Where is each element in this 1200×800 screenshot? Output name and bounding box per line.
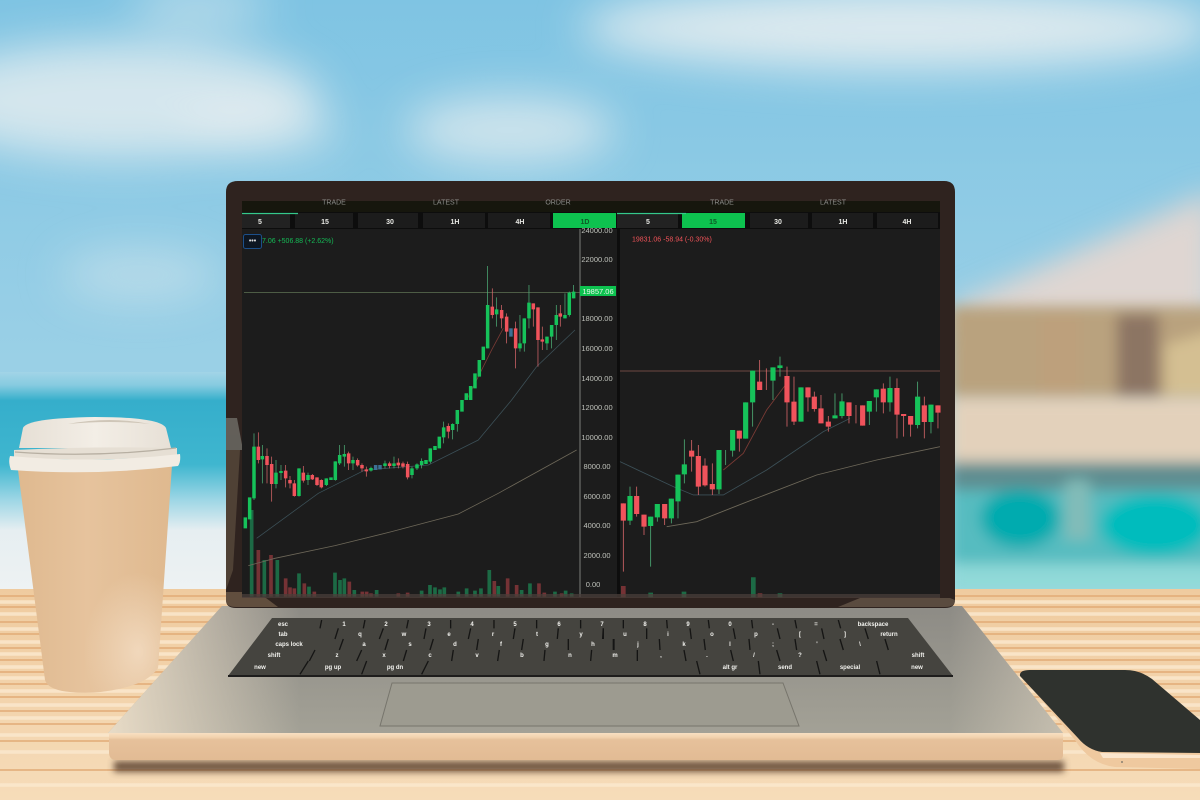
cup lid [9,417,180,472]
lid bottom reflections [226,592,955,607]
current price tag: 19857.06 [582,287,614,296]
price axis labels: 2000.00 [583,551,611,560]
header tabs row: ORDER [545,200,571,206]
laptop front edge [109,733,1063,760]
header tabs row: LATEST [820,200,847,206]
price axis labels: 12000.00 [581,403,613,412]
left chart candlesticks: lower section [245,400,462,528]
timeframe bar: 5 [258,219,262,226]
phone body edge [1020,672,1200,769]
key legends: return [880,632,898,638]
key legends: shift [912,653,924,659]
key legends: w [401,632,407,638]
left chart volume bars [252,510,572,597]
key legends: ' [816,642,818,648]
right chart volume bars [623,577,780,597]
left chart moving averages [248,328,577,566]
timeframe bar: 30 [386,219,394,226]
laptop base deck [108,606,1063,733]
key legends: - [772,622,774,628]
key legends: [ [799,632,801,638]
timeframe bar: 30 [774,219,782,226]
phone screen [1020,670,1200,753]
right chart candlesticks [623,357,938,572]
price axis labels: 22000.00 [581,255,613,264]
key legends: r [492,632,495,638]
header tabs row: LATEST [433,200,460,206]
key legends: l [729,642,731,648]
keyboard [228,618,953,677]
key legends: ; [772,642,774,648]
price line and axis rule [244,292,580,294]
coffee cup [9,417,180,693]
sky clouds [0,0,1200,300]
key legends: new [911,665,923,671]
timeframe bar: 1H [839,219,847,226]
key legends: i [667,632,669,638]
cup body [18,465,172,693]
key legends: 6 [557,622,561,628]
key legends: v [475,653,479,659]
key legends: 0 [728,622,732,628]
key legends [254,622,924,671]
key legends: k [682,642,686,648]
key legends: b [520,653,524,659]
key legends: / [753,653,755,659]
key legends: esc [278,622,289,628]
key legends: special [840,665,860,671]
price axis labels: 10000.00 [581,433,613,442]
wooden table [0,589,1200,800]
header tabs row: TRADE [322,200,346,206]
key legends: s [408,642,412,648]
price axis labels: 14000.00 [581,374,613,383]
key legends: x [382,653,386,659]
key legends: j [636,642,639,648]
key legends: = [814,622,818,628]
timeframe bar [242,212,940,229]
header tabs row: TRADE [710,200,734,206]
touchpad [380,683,799,726]
key legends: 5 [513,622,517,628]
ocean and sand left [0,372,240,592]
key legends: h [591,642,595,648]
key legends: 8 [643,622,647,628]
beach background [0,0,1200,600]
key separators [300,620,614,674]
key legends: caps lock [275,642,303,648]
key legends: \ [859,642,861,648]
price axis labels: 4000.00 [583,521,611,530]
key legends: m [612,653,618,659]
price axis labels: 18000.00 [581,314,613,323]
header tabs row [242,200,940,213]
timeframe bar: 1H [451,219,459,226]
timeframe bar: 4H [516,219,524,226]
left price readout: 7.06 +506.88 (+2.62%) [262,238,334,245]
blurred beach hut right [950,190,1200,594]
key legends: pg dn [387,665,403,671]
key legends: y [579,632,583,638]
key legends: alt gr [723,665,738,671]
price axis labels: 16000.00 [581,344,613,353]
timeframe bar: 4H [903,219,911,226]
key legends: d [453,642,457,648]
key legends: g [545,642,549,648]
laptop lid [226,181,955,608]
screen bottom strip [242,594,940,598]
key legends: 3 [427,622,431,628]
timeframe bar: 5 [646,219,650,226]
price axis labels: 8000.00 [583,462,611,471]
key legends: q [358,632,362,638]
price axis labels: 0.00 [586,580,600,589]
laptop shadow [114,761,1064,772]
left price readout [244,234,334,248]
key legends: p [754,632,758,638]
key legends: 7 [600,622,604,628]
key legends: z [336,653,338,659]
key legends: e [447,632,451,638]
smartphone [1020,670,1200,769]
key legends: 9 [686,622,690,628]
key legends: send [778,665,792,671]
key legends: n [568,653,572,659]
timeframe bar: 15 [321,219,329,226]
key legends: pg up [325,665,341,671]
laptop [108,181,1064,772]
key legends: a [362,642,366,648]
key legends: backspace [858,622,889,628]
chart pane divider [617,229,620,597]
key legends: . [706,653,708,659]
key legends: o [710,632,714,638]
price axis labels: 6000.00 [583,492,611,501]
left price readout: ••• [249,238,257,245]
price axis labels [581,226,613,589]
key legends: c [428,653,432,659]
right chart moving averages [620,383,940,527]
key legends: shift [268,653,280,659]
key legends: 4 [470,622,474,628]
key legends: u [623,632,627,638]
key legends: f [500,642,503,648]
key legends: ? [798,653,802,659]
key legends: , [660,653,662,659]
key legends: 1 [342,622,346,628]
cup reflection on bezel [226,418,243,590]
key legends: ] [844,632,846,638]
key legends: new [254,665,266,671]
timeframe bar: 15 [709,219,717,226]
right price readout: 19831.06 -58.94 (-0.30%) [632,236,712,244]
key legends: 2 [384,622,388,628]
key legends: t [536,632,538,638]
timeframe bar: 1D [581,219,589,226]
screen [242,200,940,598]
left chart candlesticks: upper section [466,266,574,400]
price axis labels: 24000.00 [581,226,613,235]
key legends: tab [278,632,288,638]
